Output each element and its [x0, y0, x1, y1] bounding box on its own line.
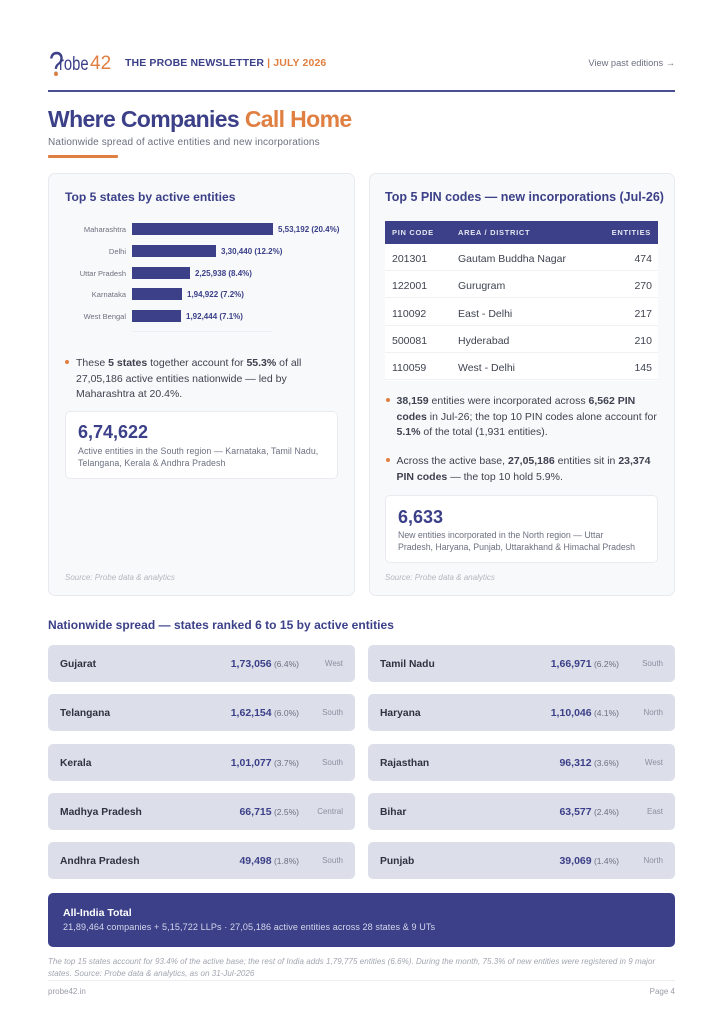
callout: South region: 6,74,622 [78, 422, 148, 442]
row 110092: East - Delhi [458, 308, 512, 320]
source: right panel: Source: Probe data & analytics [385, 573, 495, 582]
bar: Uttar Pradesh [132, 267, 190, 279]
row 122001: 122001 [392, 280, 427, 292]
bullet: active base [386, 455, 650, 482]
bar label: Karnataka: Karnataka [92, 290, 126, 299]
bar label: Uttar Pradesh: Uttar Pradesh [80, 269, 126, 278]
row 500081: 500081 [392, 335, 427, 347]
card: Kerala [48, 744, 355, 780]
card: Telangana: 1,62,154 (6.0%) [231, 707, 299, 719]
card: Gujarat [48, 645, 355, 682]
footnote: states. Source: Probe data & analytics, as on 31-Jul-2026 [48, 968, 254, 978]
card: Gujarat: West [325, 659, 343, 668]
bullet: top states: Maharashtra at 20.4%. [76, 388, 182, 400]
card: Andhra Pradesh [48, 842, 355, 878]
row 201301: Gautam Buddha Nagar [458, 253, 566, 265]
card: Madhya Pradesh: Central [317, 807, 343, 816]
bullet: incorporations: 38,159 entities were incorporated across 6,562 PIN [396, 395, 635, 407]
past editions link: View past editions → [588, 58, 675, 68]
callout: North region: Pradesh, Haryana, Punjab, Uttarakhand & Himachal Pradesh [398, 542, 635, 552]
footnote [48, 957, 656, 978]
bullet: top states [65, 357, 301, 400]
card: Tamil Nadu: 1,66,971 (6.2%) [551, 658, 619, 670]
card: Rajasthan: 96,312 (3.6%) [559, 757, 619, 769]
bar label: Maharashtra: Maharashtra [84, 225, 126, 234]
card: Telangana: South [322, 708, 343, 717]
row 500081: 210 [634, 335, 652, 347]
card: Andhra Pradesh: Andhra Pradesh [60, 856, 140, 867]
value: Karnataka: 1,94,922 (7.2%) [187, 290, 244, 299]
card: Tamil Nadu: Tamil Nadu [380, 659, 435, 670]
row 110092 [385, 299, 658, 326]
title: Where Companies Call Home [48, 106, 352, 132]
logo: robe [58, 53, 88, 75]
table header: AREA / DISTRICT [458, 228, 530, 237]
bar: Delhi [132, 245, 216, 257]
bar: Karnataka [132, 288, 182, 300]
bullet: active base: PIN codes — the top 10 hold 5.9%. [396, 470, 563, 482]
bar label: Delhi: Delhi [109, 247, 126, 256]
banner: all-India total: All-India Total [63, 907, 132, 919]
card: Bihar [368, 793, 675, 830]
row 201301 [385, 244, 658, 271]
card: Telangana [48, 694, 355, 730]
card: Bihar: Bihar [380, 807, 406, 818]
row 110059: 110059 [392, 362, 426, 374]
row 110092: 217 [634, 308, 652, 320]
card: Haryana [368, 694, 675, 730]
card: Bihar: East [647, 807, 663, 816]
row 122001 [385, 271, 658, 298]
footer: page number: Page 4 [650, 987, 675, 996]
section heading: Nationwide spread — states ranked 6 to 15 by active entities [48, 618, 394, 632]
card: Bihar: 63,577 (2.4%) [559, 806, 619, 818]
logo [49, 45, 111, 82]
value: Maharashtra: 5,53,192 (20.4%) [278, 225, 339, 234]
callout: North region [385, 495, 658, 563]
row 122001: Gurugram [458, 280, 505, 292]
callout: South region: Telangana, Kerala & Andhra Pradesh [78, 458, 225, 468]
bullet: top states: These 5 states together account for 55.3% of all [76, 357, 301, 369]
newsletter title: THE PROBE NEWSLETTER | JULY 2026 [125, 57, 326, 69]
row 110092: 110092 [392, 308, 426, 320]
callout: South region [65, 411, 338, 479]
bullet: incorporations: codes in Jul-26; the top 10 PIN codes alone account for [396, 410, 657, 422]
card: Punjab: North [643, 856, 663, 865]
table header [385, 221, 658, 244]
panel: top 5 PIN codes [369, 173, 675, 596]
callout: South region: Active entities in the South region — Karnataka, Tamil Nadu, [78, 446, 318, 456]
table: PIN codes [385, 221, 658, 381]
callout: North region: 6,633 [398, 507, 443, 527]
card: Kerala: South [322, 758, 343, 767]
card: Gujarat: Gujarat [60, 659, 96, 670]
card: Haryana: North [643, 708, 663, 717]
card: Telangana: Telangana [60, 708, 110, 719]
banner: all-India total [48, 893, 675, 947]
row 201301: 201301 [392, 253, 427, 265]
card: Kerala: 1,01,077 (3.7%) [231, 757, 299, 769]
card: Andhra Pradesh: South [322, 856, 343, 865]
card: Tamil Nadu: South [642, 659, 663, 668]
table header: ENTITIES [612, 228, 651, 237]
bullet: top states: 27,05,186 active entities nationwide — led by [76, 372, 287, 384]
card: Tamil Nadu [368, 645, 675, 682]
card: Haryana: 1,10,046 (4.1%) [551, 707, 619, 719]
card: Madhya Pradesh: Madhya Pradesh [60, 807, 142, 818]
row 201301: 474 [634, 253, 652, 265]
footnote: The top 15 states account for 93.4% of the active base; the rest of India adds 1,79,775 entities (6.6%). During the month, 75.3% of new entities were registered in 9 major [48, 957, 655, 966]
callout: North region: New entities incorporated in the North region — Uttar [398, 530, 603, 540]
header rule [48, 90, 675, 92]
panel: top 5 states [48, 173, 355, 596]
subtitle: Nationwide spread of active entities and new incorporations [48, 136, 320, 148]
row 110059 [385, 353, 658, 380]
row 500081 [385, 326, 658, 353]
card: Punjab: 39,069 (1.4%) [559, 855, 619, 867]
title accent [48, 155, 118, 158]
card: Kerala: Kerala [60, 758, 91, 769]
card: Punjab: Punjab [380, 856, 414, 867]
heading: top 5 PIN codes: Top 5 PIN codes — new incorporations (Jul-26) [385, 190, 664, 204]
bullet: incorporations: 5.1% of the total (1,931 entities). [396, 426, 548, 438]
card: Rajasthan: West [645, 758, 663, 767]
row 110059: 145 [634, 362, 652, 374]
bar label: West Bengal: West Bengal [84, 312, 126, 321]
logo: ? [49, 45, 64, 82]
value: Delhi: 3,30,440 (12.2%) [221, 247, 282, 256]
card: Rajasthan [368, 744, 675, 780]
bullet: incorporations [386, 395, 657, 438]
footer: site: probe42.in [48, 987, 86, 996]
card: Haryana: Haryana [380, 708, 421, 719]
card: Rajasthan: Rajasthan [380, 758, 429, 769]
bar: Maharashtra [132, 223, 273, 235]
bullet: active base: Across the active base, 27,05,186 entities sit in 23,374 [396, 455, 650, 467]
row 122001: 270 [634, 280, 652, 292]
card: Madhya Pradesh: 66,715 (2.5%) [239, 806, 299, 818]
card: Andhra Pradesh: 49,498 (1.8%) [239, 855, 299, 867]
card: Madhya Pradesh [48, 793, 355, 830]
bar: West Bengal [132, 310, 181, 322]
banner: all-India total: 21,89,464 companies + 5,15,722 LLPs · 27,05,186 active entities across 28 states & 9 UTs [63, 922, 435, 932]
value: Uttar Pradesh: 2,25,938 (8.4%) [195, 269, 252, 278]
card: Punjab [368, 842, 675, 878]
table header: PIN CODE [392, 228, 434, 237]
row 110059: West - Delhi [458, 362, 515, 374]
header [48, 45, 675, 92]
source: left panel: Source: Probe data & analytics [65, 573, 175, 582]
logo: 42 [90, 53, 111, 74]
card: Gujarat: 1,73,056 (6.4%) [231, 658, 299, 670]
value: West Bengal: 1,92,444 (7.1%) [186, 312, 243, 321]
row 500081: Hyderabad [458, 335, 509, 347]
heading: top 5 states: Top 5 states by active entities [65, 190, 236, 204]
